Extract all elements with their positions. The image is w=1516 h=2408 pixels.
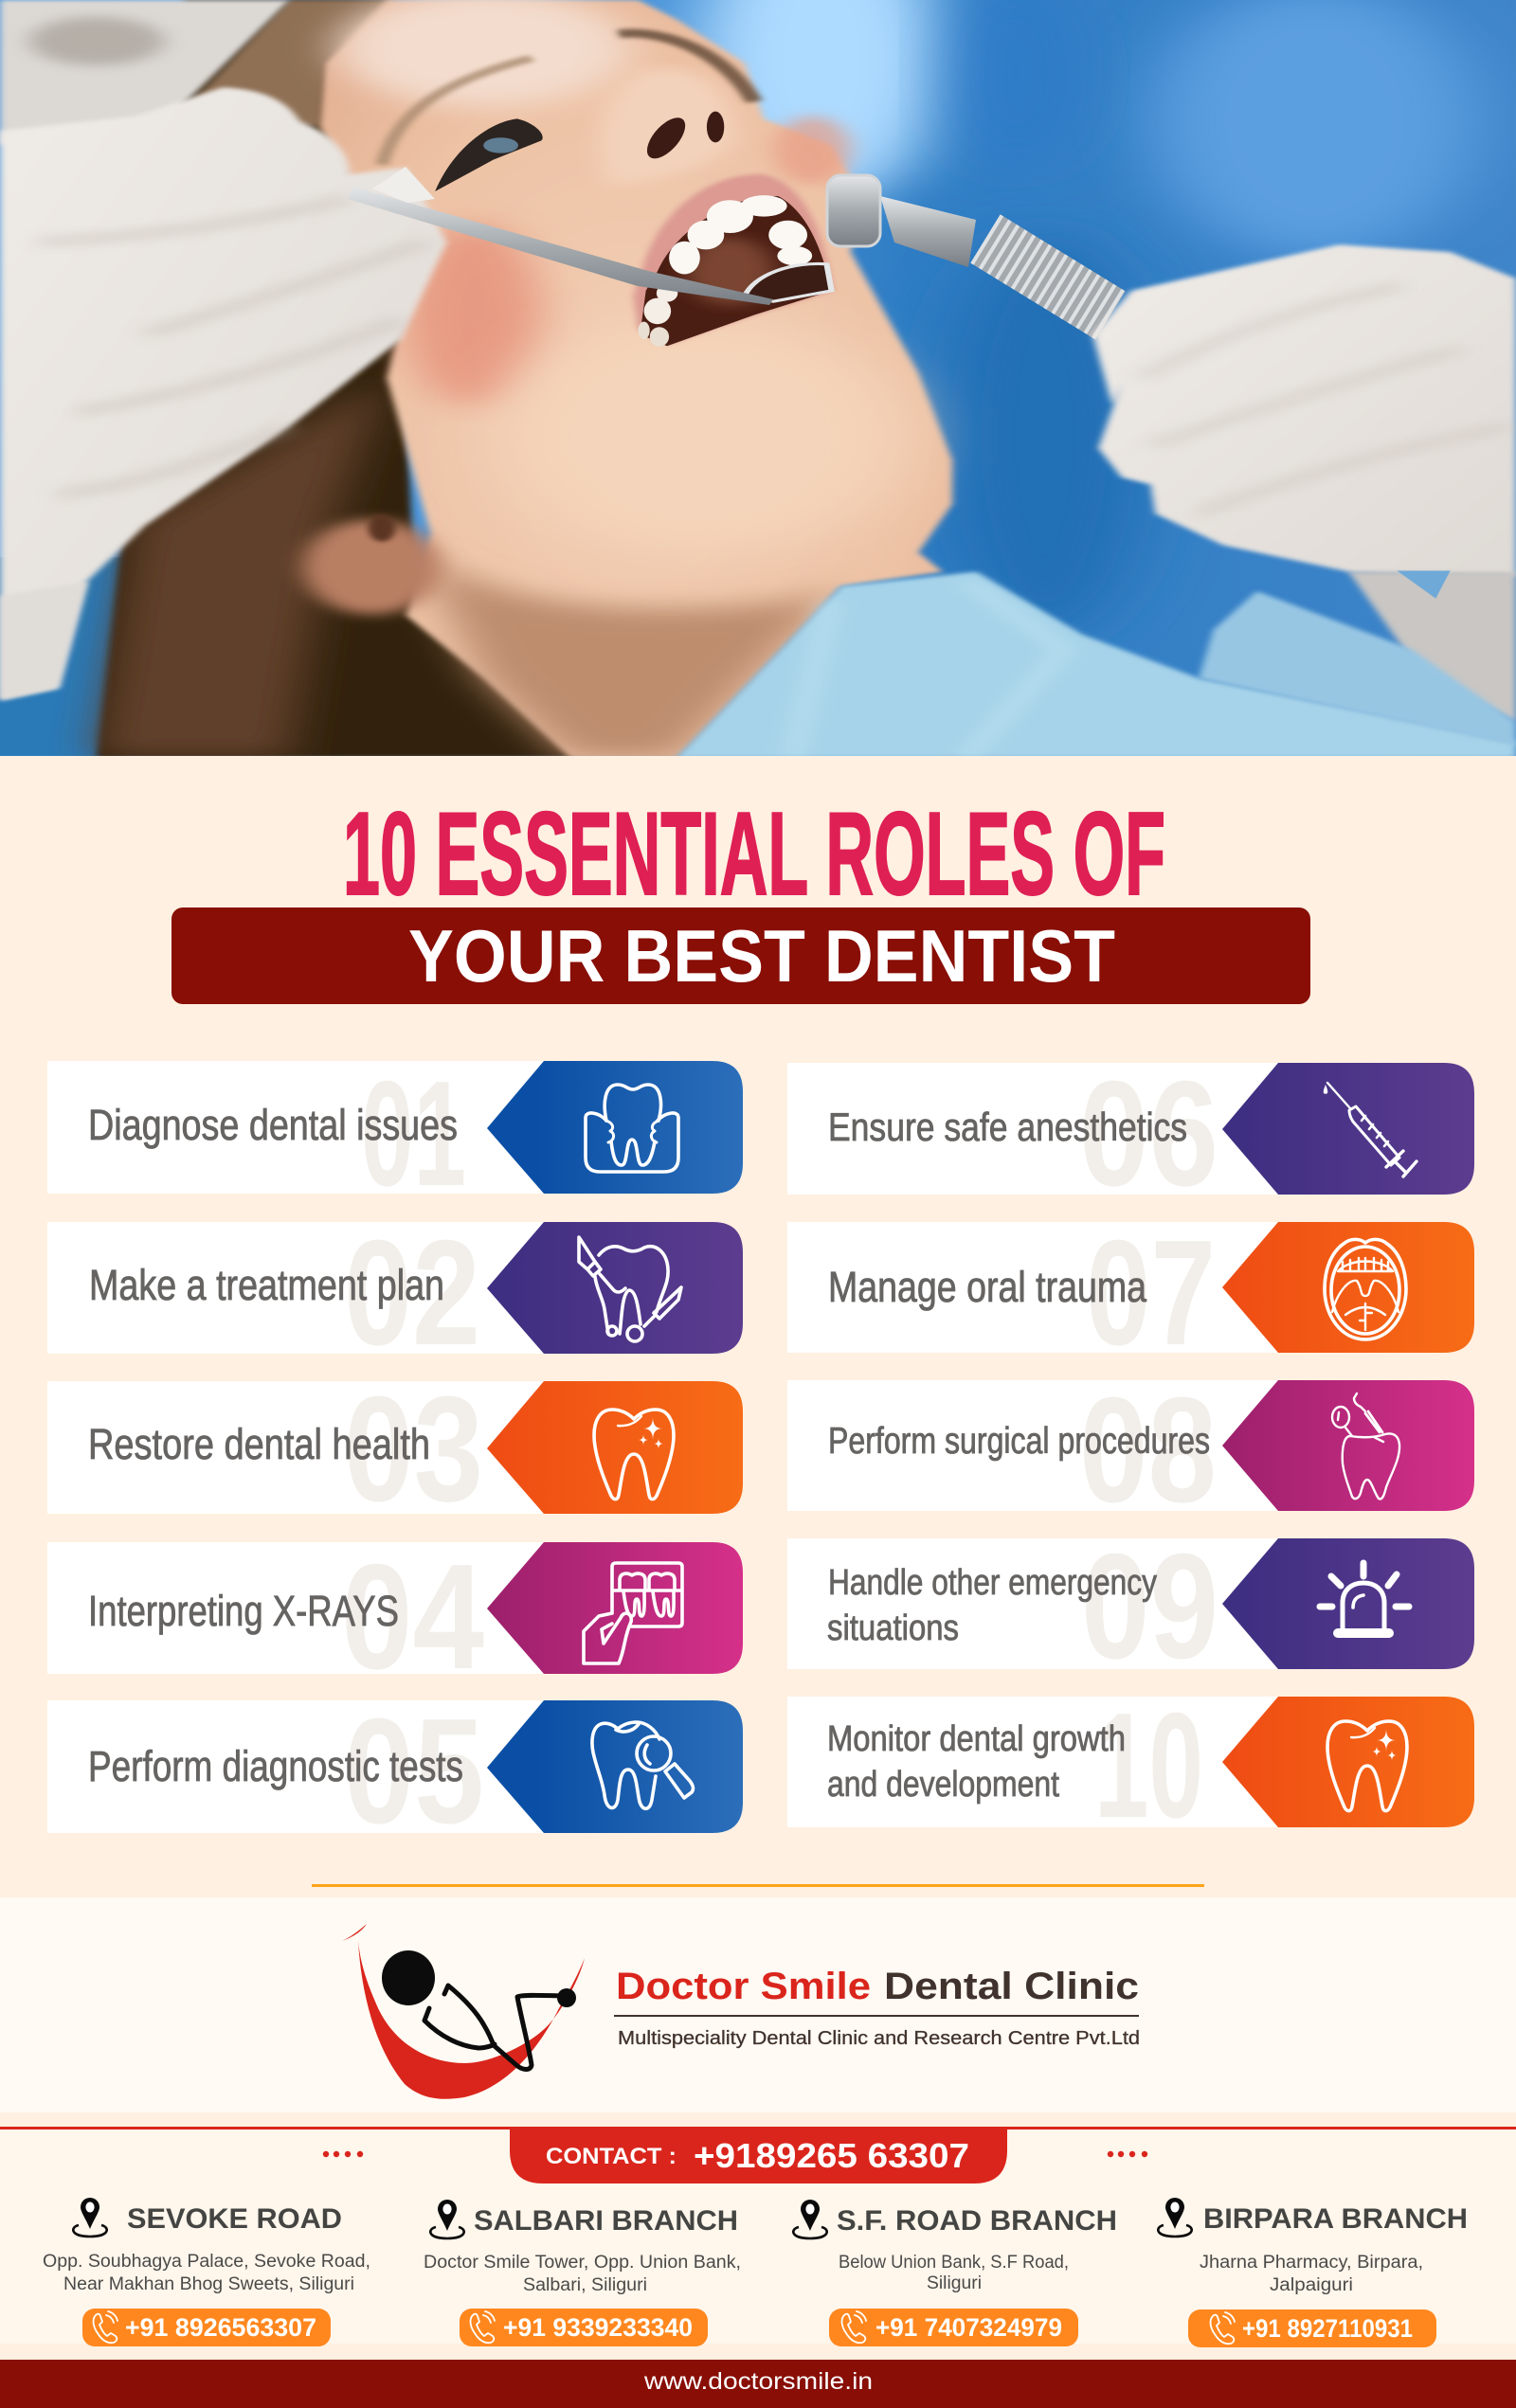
card 03: restore dental health: Restore dental health: [88, 1420, 430, 1468]
phone pill: +91 8927110931: [1242, 2314, 1413, 2343]
icon: map pin: [793, 2200, 827, 2238]
branch: birpara: Jalpaiguri: [1270, 2275, 1353, 2295]
card 01: diagnose dental issues: Diagnose dental issues: [88, 1101, 458, 1149]
phone pill: [82, 2309, 331, 2346]
card 05: perform diagnostic tests: [47, 1688, 743, 1855]
card 02: make a treatment plan: [47, 1210, 743, 1376]
phone pill: [460, 2309, 708, 2346]
branch: sevoke road: Near Makhan Bhog Sweets, Siliguri: [63, 2274, 354, 2294]
icon: open mouth: [1325, 1239, 1406, 1339]
phone pill: +91 8926563307: [125, 2313, 316, 2342]
card 10: monitor dental growth and development: 10: [1094, 1682, 1203, 1849]
red rule: [0, 2127, 1516, 2129]
branch: s.f. road: [793, 2200, 1117, 2346]
branch: s.f. road: S.F. ROAD BRANCH: [837, 2205, 1117, 2237]
branch: salbari: Doctor Smile Tower, Opp. Union Bank,: [424, 2253, 741, 2273]
dots left: [323, 2151, 363, 2157]
card 01: diagnose dental issues: [47, 1051, 743, 1217]
photo: dentist treating a patient: [0, 0, 1516, 761]
branch: salbari: Salbari, Siliguri: [523, 2275, 647, 2295]
logo mark: smile and stethoscope: [342, 1924, 585, 2099]
text block: growth and development: [827, 1719, 1126, 1805]
card 04: interpreting x-rays: 04: [341, 1534, 484, 1700]
card 02: make a treatment plan: Make a treatment plan: [89, 1261, 444, 1309]
icon: tooth with dental tools: [579, 1237, 681, 1341]
icon: tooth with mirror and probe: [1332, 1393, 1399, 1499]
branch: salbari: [424, 2200, 741, 2346]
card 03: restore dental health: [47, 1366, 743, 1533]
branch: s.f. road: Siliguri: [927, 2273, 982, 2293]
branch: sevoke road: [43, 2198, 370, 2346]
branch: salbari: SALBARI BRANCH: [474, 2205, 738, 2237]
icon: syringe: [1324, 1083, 1417, 1177]
panel: clinic logo: [0, 1897, 1516, 2112]
text block: emergency situations: situations: [827, 1608, 959, 1648]
card 06: ensure safe anesthetics: 06: [1079, 1051, 1218, 1217]
branch: sevoke road: SEVOKE ROAD: [127, 2203, 342, 2235]
phone pill: [1188, 2309, 1436, 2347]
card 04: interpreting x-rays: [47, 1534, 743, 1700]
text block: growth and development: Monitor dental growth: [827, 1719, 1126, 1759]
card 02: make a treatment plan: 02: [344, 1210, 480, 1376]
icon: shiny tooth: [1327, 1721, 1407, 1811]
text block: growth and development: and development: [827, 1765, 1059, 1805]
contact pill: +9189265 63307: [694, 2136, 969, 2175]
card 09: handle other emergency situations: 09: [1081, 1523, 1218, 1690]
footer with website: www.doctorsmile.in: [643, 2368, 873, 2395]
icon: alarm beacon: [1320, 1563, 1409, 1633]
card 10: monitor dental growth and development: [787, 1682, 1474, 1849]
dots right: [1108, 2151, 1147, 2157]
phone pill: [829, 2309, 1078, 2346]
icon: map pin: [73, 2198, 107, 2237]
icon: shiny tooth: [594, 1410, 674, 1500]
card 05: perform diagnostic tests: Perform diagnostic tests: [88, 1742, 463, 1790]
contact pill: [510, 2127, 1007, 2183]
card 07: manage oral trauma: Manage oral trauma: [828, 1263, 1147, 1311]
icon: tooth with gums: [586, 1085, 678, 1172]
text block: emergency situations: Handle other emergency: [828, 1563, 1157, 1603]
panel: branches background: [0, 2129, 1516, 2344]
icon: map pin: [1158, 2198, 1192, 2237]
icon: hand holding x-ray: [584, 1563, 682, 1663]
card 03: restore dental health: 03: [344, 1366, 483, 1533]
title banner: [171, 907, 1310, 1004]
card 04: interpreting x-rays: Interpreting X-RAYS: [88, 1587, 399, 1635]
card 06: ensure safe anesthetics: Ensure safe anesthetics: [828, 1105, 1187, 1149]
phone pill: +91 9339233340: [503, 2313, 693, 2342]
branch: birpara: BIRPARA BRANCH: [1203, 2203, 1468, 2235]
branch: birpara: Jharna Pharmacy, Birpara,: [1200, 2253, 1423, 2273]
panel: clinic logo: Dental Clinic: [884, 1966, 1139, 2007]
branch: sevoke road: Opp. Soubhagya Palace, Sevoke Road,: [43, 2252, 370, 2272]
icon: map pin: [430, 2200, 464, 2238]
card 01: diagnose dental issues: 01: [361, 1051, 466, 1217]
card 06: ensure safe anesthetics: [787, 1051, 1474, 1217]
card 07: manage oral trauma: 07: [1086, 1210, 1216, 1376]
card 08: perform surgical procedures: [787, 1367, 1474, 1534]
contact pill: CONTACT :: [546, 2144, 677, 2169]
footer with website: [0, 2360, 1516, 2408]
branch: birpara: [1158, 2198, 1468, 2347]
phone pill: +91 7407324979: [875, 2313, 1062, 2342]
card 07: manage oral trauma: [787, 1210, 1474, 1376]
text block: emergency situations: [827, 1563, 1157, 1648]
panel: clinic logo: Multispeciality Dental Clinic and Research Centre Pvt.Ltd: [618, 2028, 1140, 2049]
card 08: perform surgical procedures: 08: [1079, 1367, 1217, 1534]
branch: s.f. road: Below Union Bank, S.F Road,: [839, 2253, 1069, 2273]
card 08: perform surgical procedures: Perform surgical procedures: [828, 1421, 1210, 1462]
title banner: YOUR BEST DENTIST: [408, 914, 1115, 997]
card 09: handle other emergency situations: [787, 1523, 1474, 1690]
card 05: perform diagnostic tests: 05: [344, 1688, 484, 1855]
panel: clinic logo: Doctor Smile: [616, 1966, 871, 2007]
orange divider: [312, 1884, 1204, 1887]
icon: tooth and magnifier: [592, 1722, 693, 1808]
